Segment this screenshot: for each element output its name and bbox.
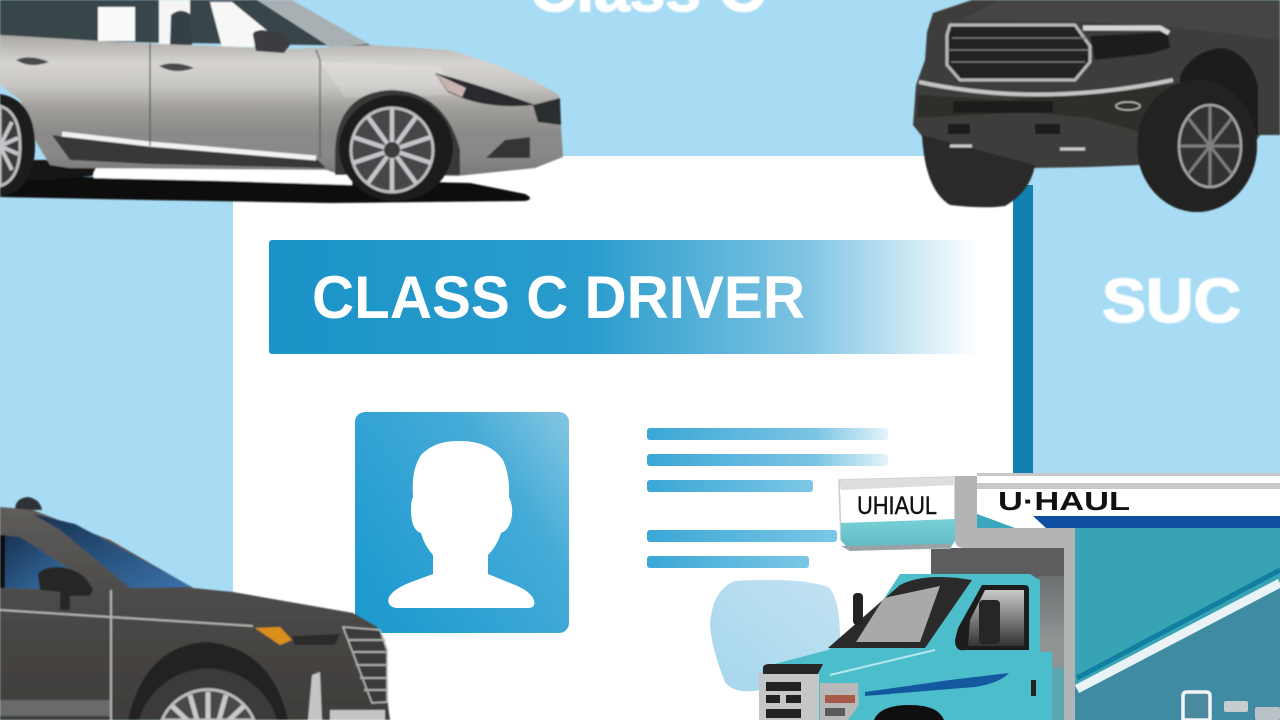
black side mirror — [853, 593, 863, 625]
vehicle: u-haul moving truck — [759, 473, 1280, 720]
suv grille — [343, 627, 387, 703]
cab windshield — [828, 577, 972, 648]
vehicle: dark pickup truck — [913, 0, 1280, 212]
sedan sill highlight — [94, 168, 352, 185]
cab hood highlight — [830, 650, 935, 675]
blue stripe on door — [865, 673, 1009, 696]
suv side window — [0, 535, 68, 590]
suv amber light — [255, 627, 292, 645]
truck chrome bumper line — [919, 80, 1173, 95]
truck headlight — [1090, 32, 1170, 60]
cab body — [760, 574, 1040, 720]
suv wheel — [128, 642, 288, 720]
vehicle: grey suv — [0, 497, 390, 720]
truck body — [913, 0, 1280, 168]
sedan door handles — [16, 57, 194, 71]
truck box side — [1070, 528, 1280, 720]
dark cab recess — [931, 548, 1066, 580]
suv bumper chrome — [308, 672, 385, 720]
suv body — [0, 507, 390, 720]
suv mirror — [38, 567, 93, 610]
panel: license card — [233, 156, 1033, 720]
truck grille — [759, 664, 823, 720]
sedan grille and vent — [533, 98, 561, 125]
door handle — [1031, 680, 1036, 696]
truck right tyre — [1137, 80, 1257, 212]
signature blob — [710, 580, 840, 691]
truck lower vents and lights — [948, 101, 1140, 149]
grey cab column — [1038, 576, 1066, 720]
truck grille — [947, 25, 1090, 80]
wheel arch — [874, 705, 944, 720]
text placeholder lines — [647, 428, 888, 568]
icon: photo tile with person silhouette — [355, 412, 569, 633]
truck headlight — [820, 683, 859, 720]
box upper panel — [977, 473, 1280, 528]
suv roof fin — [15, 497, 42, 510]
sedan body — [0, 35, 563, 176]
sedan glass — [0, 0, 372, 47]
sedan rear wheel — [0, 94, 35, 197]
sedan front wheel — [335, 90, 460, 201]
sedan ground shadow — [0, 176, 530, 203]
heading: SUC: SUC — [1102, 267, 1241, 336]
banner: class c driver — [269, 240, 980, 354]
cab side window — [955, 585, 1029, 650]
over-cab logo: UHIAUL — [857, 492, 937, 520]
grey box frame — [955, 476, 1075, 720]
banner: class c driver: CLASS C DRIVER — [312, 264, 805, 331]
sedan headlight — [435, 73, 535, 106]
vehicle: silver sedan — [0, 0, 563, 203]
suv trim lines — [0, 590, 253, 720]
box logo: U·HAUL — [998, 486, 1130, 516]
sedan underbody — [0, 160, 100, 180]
truck wheel arch and rim — [1137, 48, 1258, 212]
box decal icons — [1183, 692, 1280, 720]
sedan mirror — [253, 30, 290, 53]
suv windshield — [33, 514, 192, 588]
cab-over box — [839, 477, 955, 551]
truck left tyre — [922, 135, 1035, 207]
